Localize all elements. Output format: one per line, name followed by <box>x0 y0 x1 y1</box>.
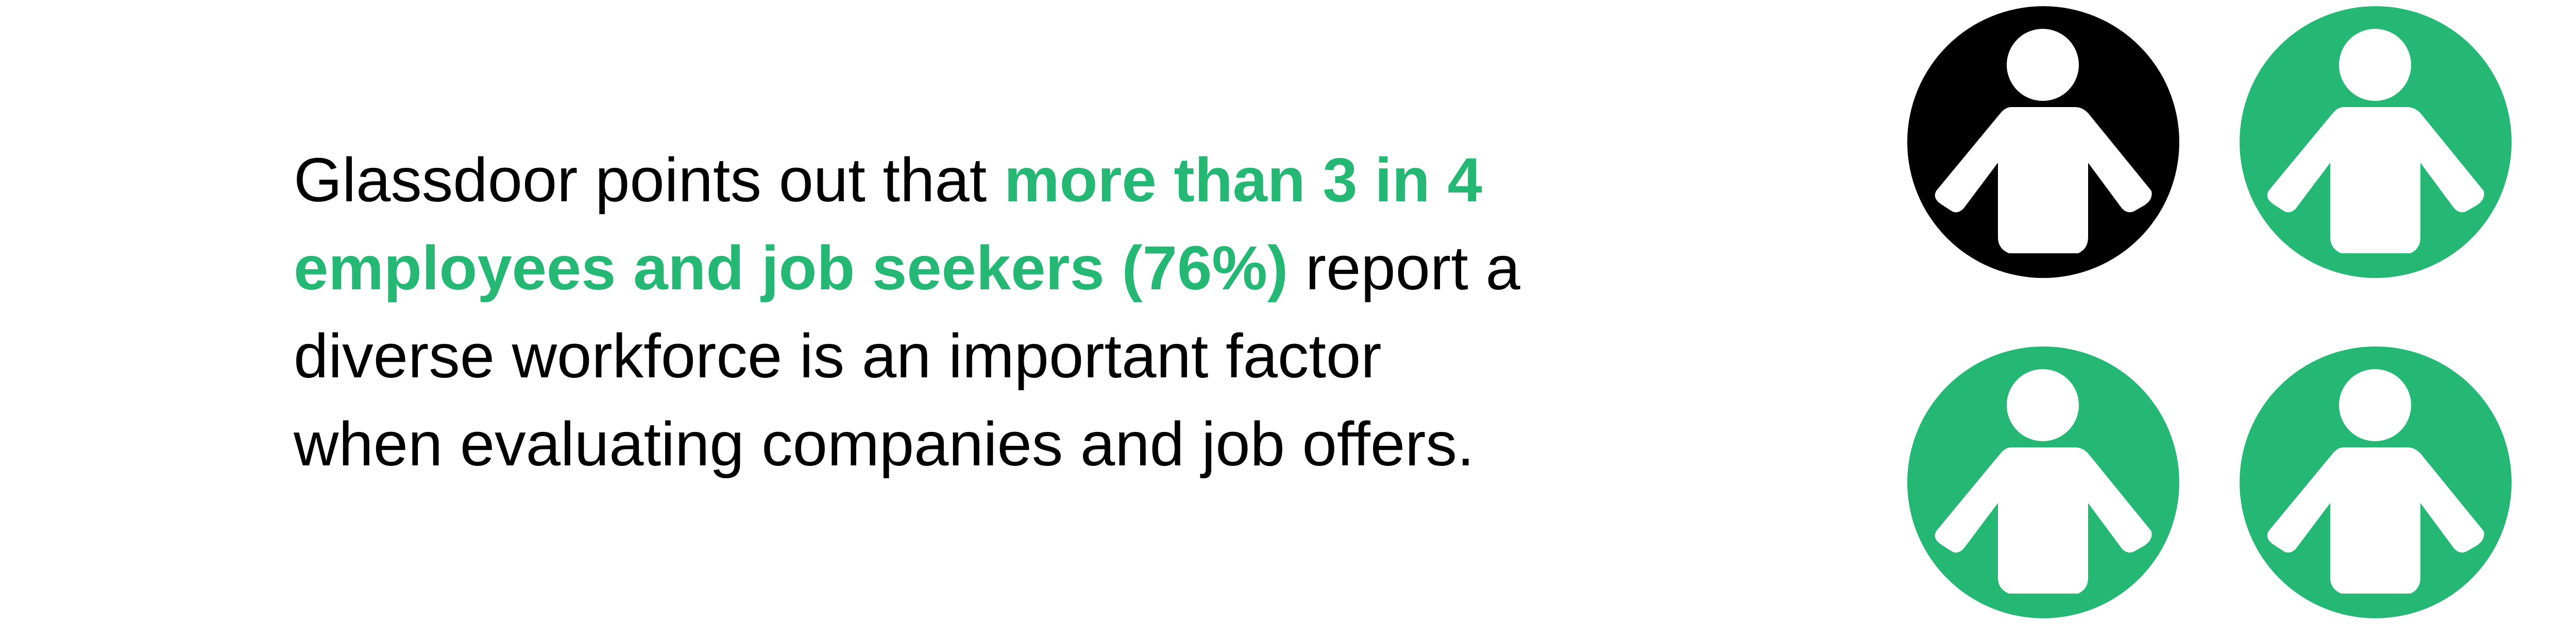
text block: statistic: when evaluating companies and job offers. <box>294 409 1475 479</box>
icon: person green bottom right <box>2240 346 2512 618</box>
text block: statistic: employees and job seekers (76%) report a <box>294 233 1520 303</box>
text block: statistic: diverse workforce is an important factor <box>294 321 1382 391</box>
text block: statistic: Glassdoor points out that more than 3 in 4 <box>294 145 1482 215</box>
icon: person green bottom left <box>1907 346 2179 618</box>
icon: person green top right <box>2240 6 2512 278</box>
text block: statistic <box>294 145 1520 479</box>
icon: person black <box>1907 6 2179 278</box>
